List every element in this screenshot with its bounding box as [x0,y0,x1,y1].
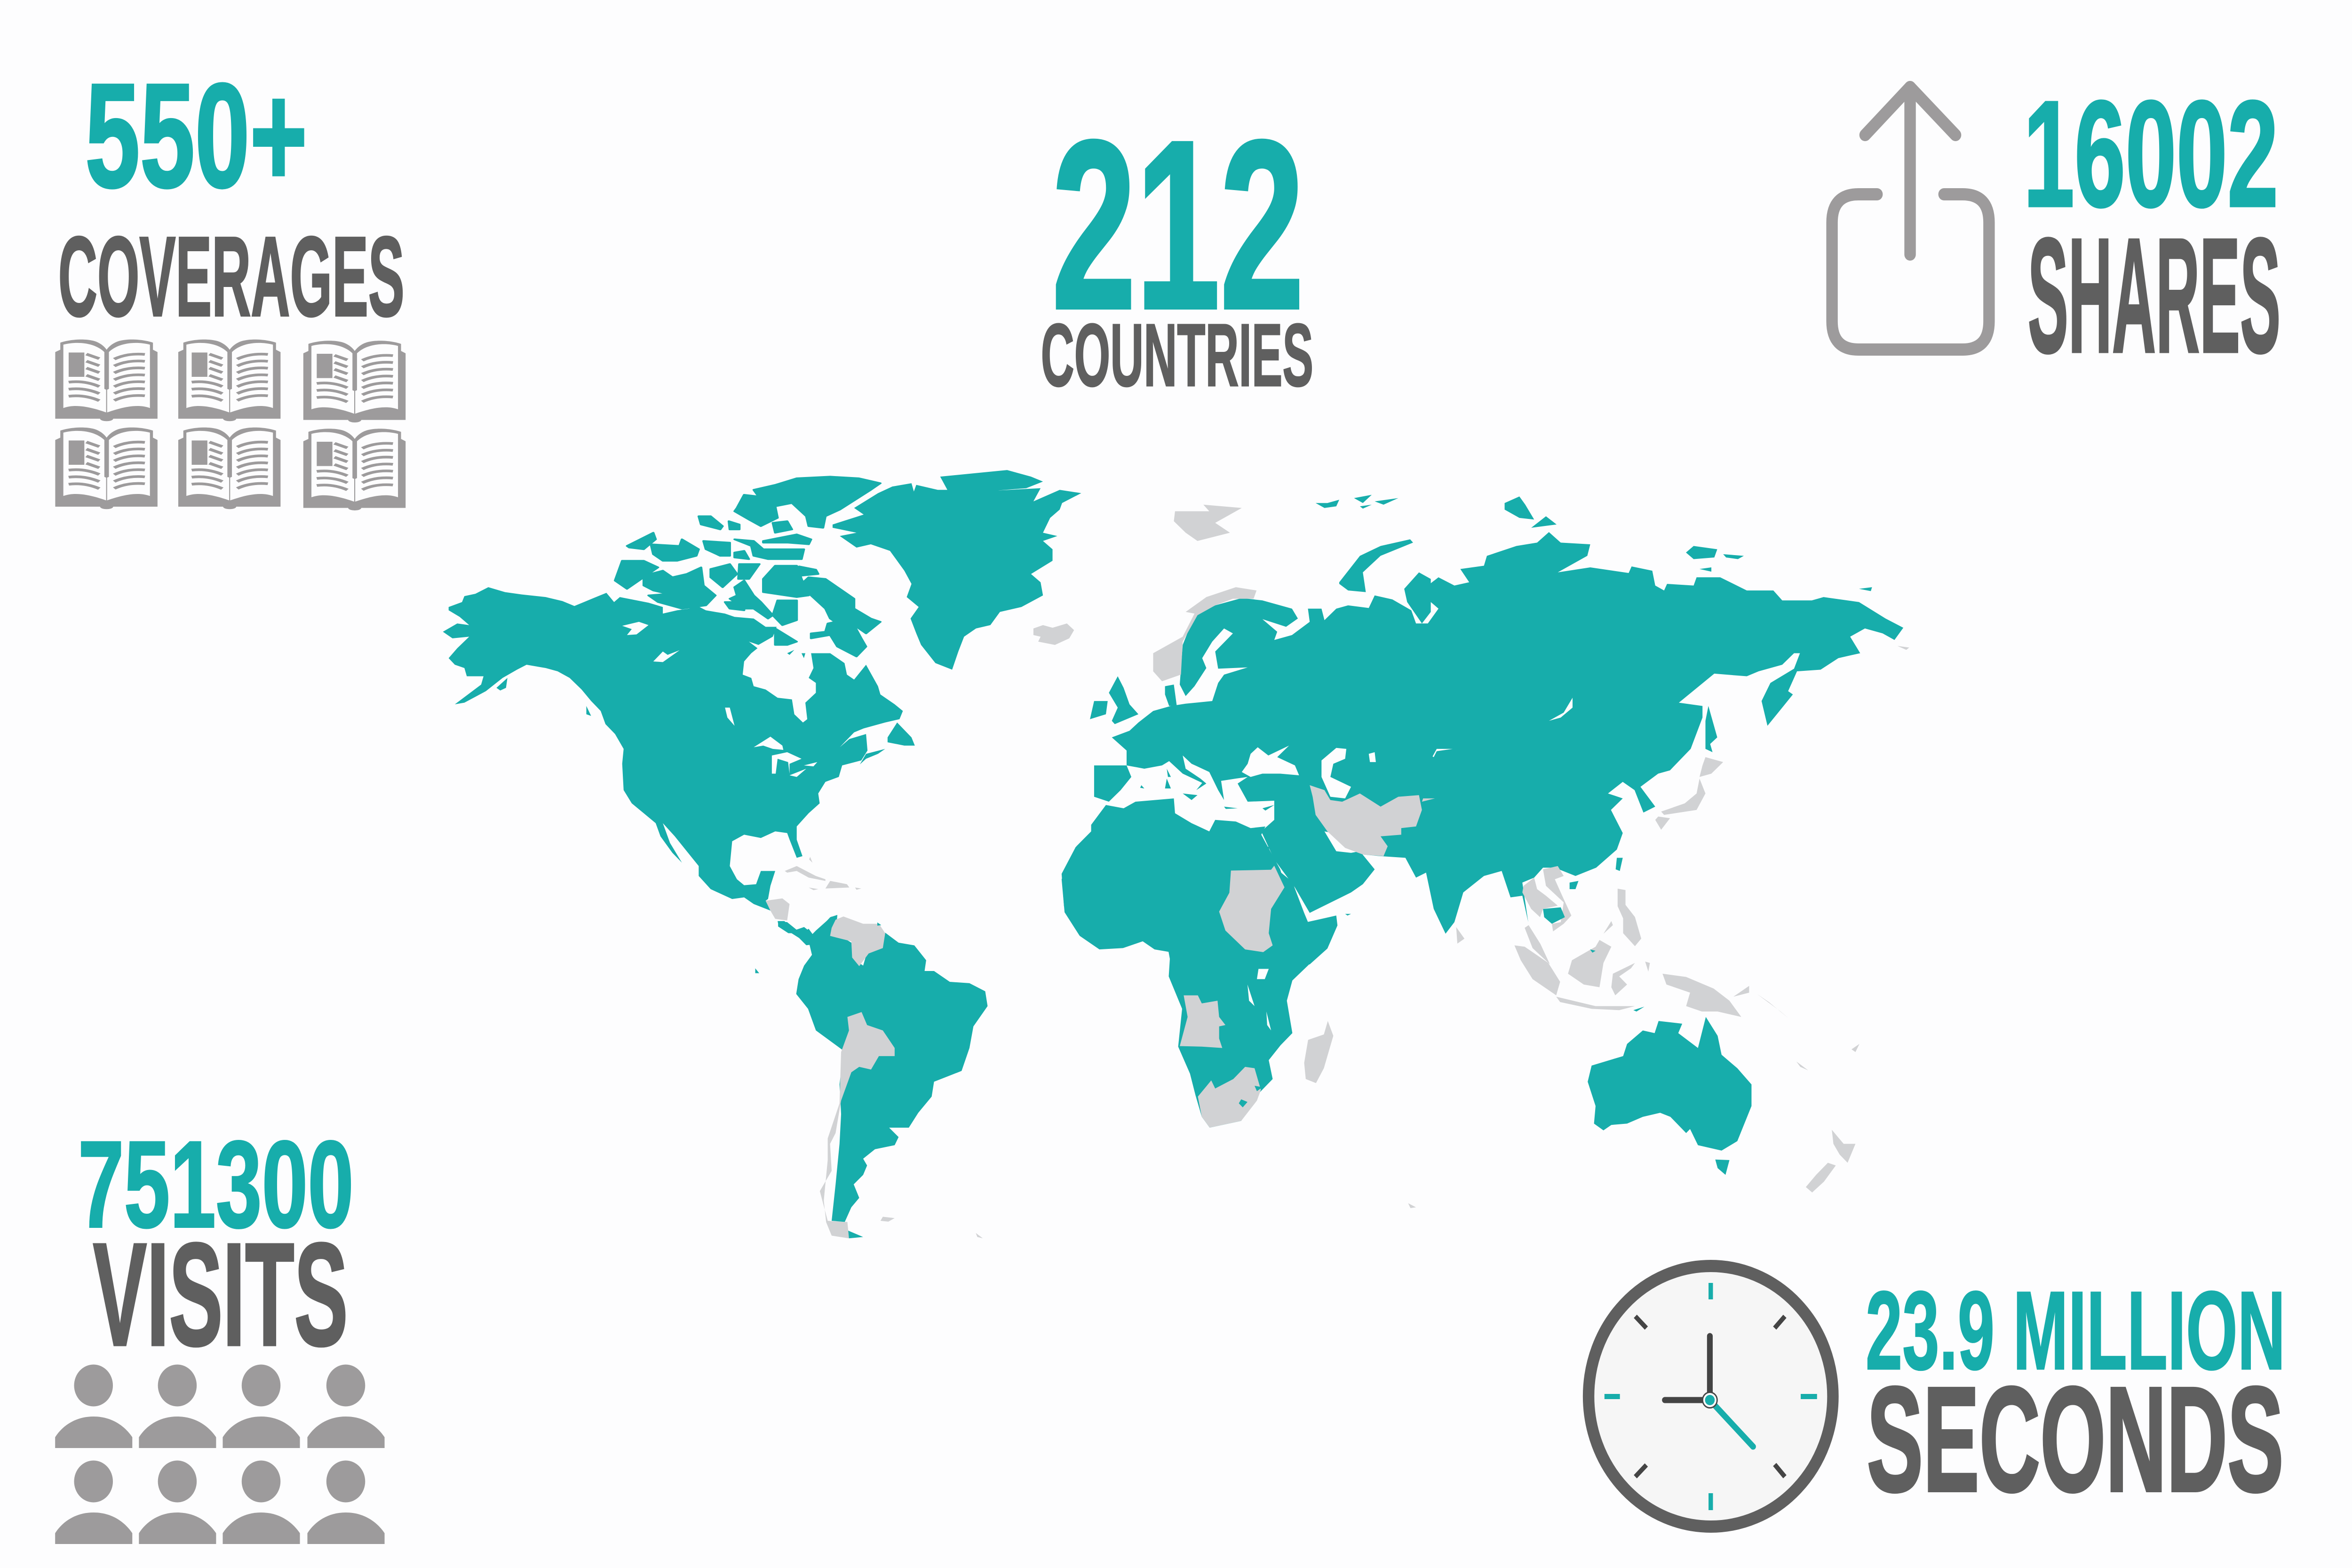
icon: share arrow out of box [1832,87,1989,350]
icon: grid of open books [55,340,405,510]
heading: 550+: 550+ [85,53,307,218]
South America grey: Venezuela, Bolivia and Chile [820,916,1416,1238]
Brunei and Timor [1590,949,1645,1011]
panel: shares [1832,69,2280,387]
heading: 751300: 751300 [78,1115,354,1253]
label: countries: COUNTRIES [1041,305,1313,405]
panel: countries [1041,91,1313,405]
Panama [778,921,812,939]
Central America isthmus [778,915,837,945]
African lakes [1248,969,1271,1030]
Iberia [1094,765,1131,802]
North America mainland [443,587,903,911]
map: southern continents [755,847,1859,1238]
icon: grid of people [55,1364,385,1544]
North American lakes [622,622,817,777]
map: North America [443,470,1081,945]
South America [796,916,987,1238]
heading: 212: 212 [1052,91,1304,358]
Atlantic and Pacific Canadian islands [496,650,915,764]
European and Arctic islands [1090,495,1872,915]
Africa grey: Sudan, Angola, South Africa, Madagascar [1180,866,1333,1128]
panel: visits [55,1115,385,1544]
Central and Southern Africa [1062,847,1335,1128]
Eurasia mainland [1112,532,1903,934]
world map [443,470,1909,1238]
Prince Charles island cut-out [813,609,824,619]
Canadian Arctic islands [615,477,881,656]
map: Eurasia and North Africa [1062,495,1909,964]
panel: coverages [55,53,405,510]
Cambodia [1543,907,1565,924]
panel: seconds [1589,1266,2285,1527]
Lesotho and Swaziland [1239,1086,1263,1107]
Greenland [833,470,1081,670]
Australia [1588,1017,1751,1151]
North Africa [1062,798,1337,964]
inland seas and lakes [1242,698,1573,798]
South America islands [755,923,881,973]
label: visits: VISITS [93,1212,348,1376]
Caribbean and Iceland, not covered [766,623,1074,921]
grey countries: Norway, Iran, Southeast Asia, Japan, Svalbard [1153,505,1909,944]
label: coverages: COVERAGES [58,213,405,340]
Tasmania [1715,1160,1730,1175]
icon: clock [1589,1266,1833,1527]
Indonesia, Philippines, Oceania, not covered [1514,889,1859,1193]
